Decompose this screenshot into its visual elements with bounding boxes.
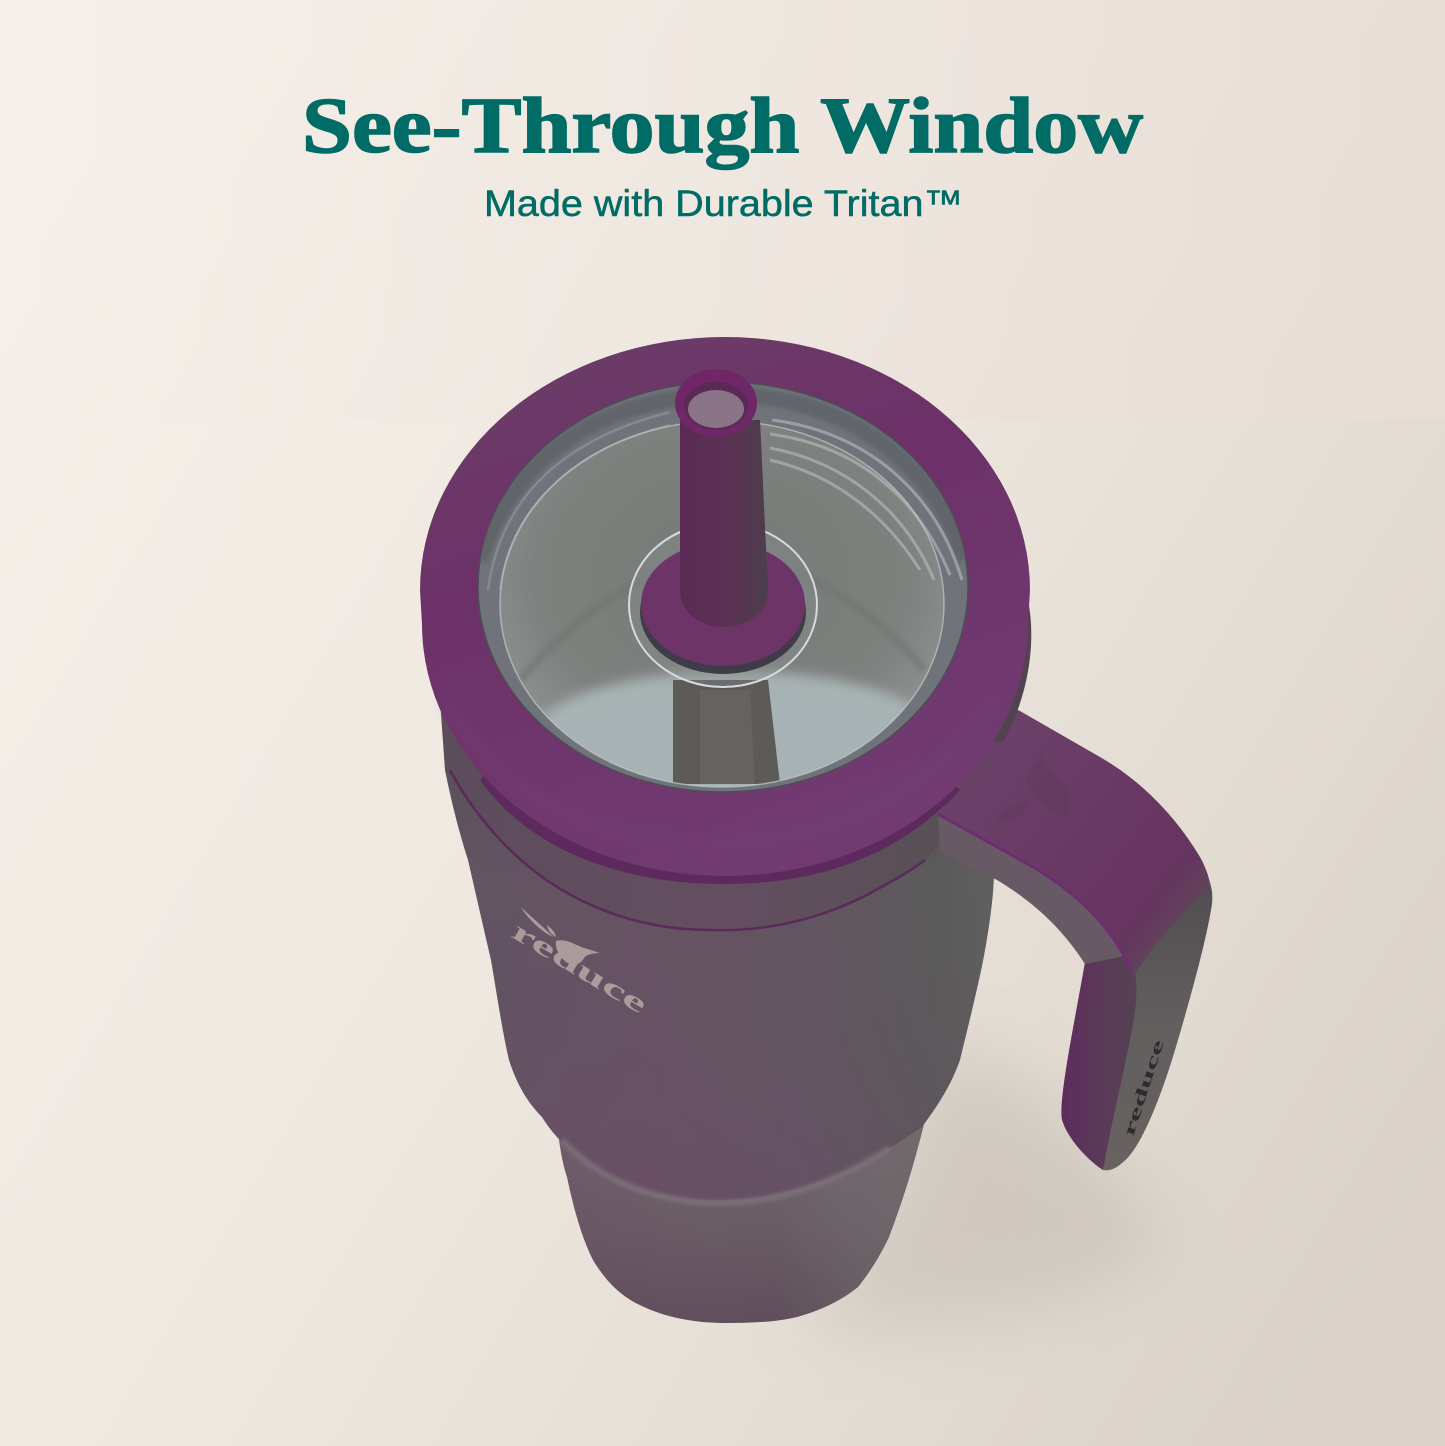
- handle: [938, 695, 1212, 1170]
- lower bright crescent: [544, 667, 910, 787]
- straw tube: [680, 420, 768, 627]
- lid rim: [420, 337, 1030, 876]
- cup interior: [500, 424, 944, 716]
- lid rim underlip: [480, 760, 960, 884]
- tumbler upper body: [445, 770, 1000, 1200]
- window rim line: [500, 421, 944, 787]
- straw grommet bubble: [629, 523, 817, 687]
- handle crease: [938, 814, 1132, 972]
- tumbler with straw lid and handle: [420, 337, 1212, 1323]
- leaf mark: [521, 907, 600, 965]
- left thread band: [488, 412, 670, 590]
- handle outer side face: [1103, 880, 1212, 1170]
- straw mouth rim: [675, 369, 757, 437]
- straw: [675, 369, 768, 627]
- infographic canvas: [306, 0, 1445, 1446]
- handle underside band: [938, 814, 1130, 964]
- collar band: [440, 700, 1000, 930]
- handle inner side face: [1061, 951, 1136, 1170]
- collar groove: [450, 770, 925, 930]
- rim front lip highlight: [445, 700, 995, 842]
- subtitle: Made with Durable Tritan™: [484, 183, 963, 224]
- lid underside behind rim: [985, 600, 1031, 742]
- window outer clear ring: [478, 382, 968, 792]
- tumbler lower base: [558, 1120, 925, 1323]
- lower base shading: [558, 1120, 925, 1323]
- handle top face: [938, 695, 1211, 975]
- handle brand mark: reduce: [1121, 1038, 1168, 1138]
- straw washer: [641, 542, 805, 666]
- interior wall line: [519, 638, 926, 681]
- thread highlights: [770, 420, 962, 580]
- reflection centre: [700, 690, 755, 784]
- brand word: reduce: [507, 915, 653, 1019]
- straw opening: [684, 382, 748, 430]
- grommet shadow: [640, 550, 806, 674]
- upper glass band: [480, 395, 965, 560]
- see-through lid window: [478, 382, 968, 799]
- body tonal overlay: [445, 770, 1000, 1200]
- logo on body: [507, 907, 653, 1019]
- straw reflection: [673, 680, 780, 784]
- straw inner view: [688, 390, 744, 428]
- handle leaf emboss: [996, 752, 1070, 821]
- title: See-Through Window: [302, 83, 1143, 170]
- step highlight: [562, 1140, 890, 1203]
- tumbler shadow: [800, 1040, 1170, 1327]
